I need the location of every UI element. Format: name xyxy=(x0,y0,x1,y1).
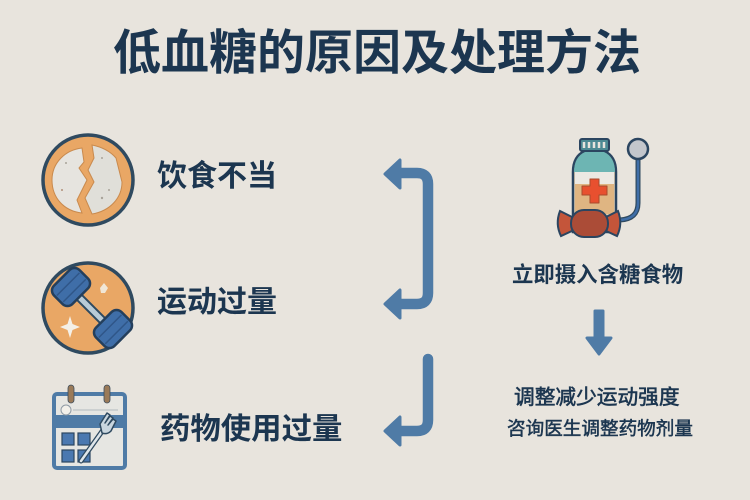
label: cause 2: 运动过量 xyxy=(157,286,277,319)
title: 低血糖的原因及处理方法 xyxy=(113,27,641,80)
label: cause 3: 药物使用过量 xyxy=(160,412,342,446)
text: adjust exercise: 调整减少运动强度 xyxy=(514,386,680,409)
label: cause 1: 饮食不当 xyxy=(157,160,277,193)
text: immediate action: 立即摄入含糖食物 xyxy=(512,263,683,287)
text: consult doctor: 咨询医生调整药物剂量 xyxy=(507,418,693,439)
